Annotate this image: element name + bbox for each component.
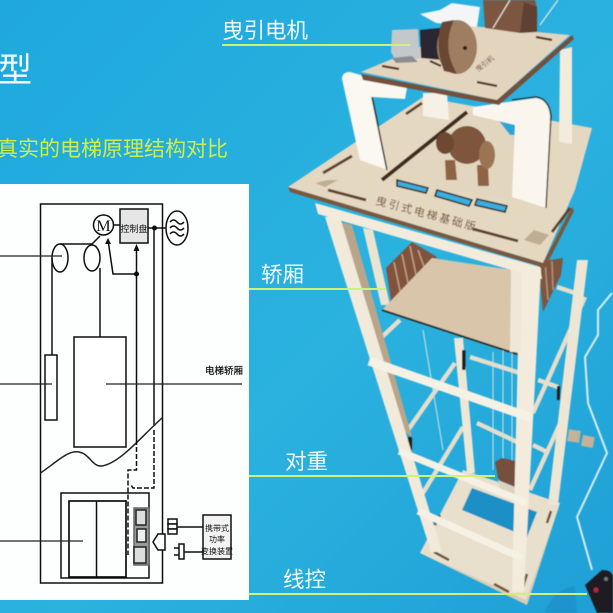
label: counterweight: 对重	[285, 450, 328, 474]
traction motor	[391, 20, 477, 74]
label: elevator car: 电梯轿厢	[205, 365, 243, 377]
lower pulley assembly	[436, 126, 495, 186]
top plate: 曳引机	[474, 54, 496, 74]
left front post	[325, 217, 442, 552]
control panel	[120, 209, 148, 243]
rear braces	[382, 287, 585, 493]
spare wooden pieces	[567, 429, 595, 448]
elevator car	[382, 242, 563, 355]
floor highlight	[545, 586, 577, 613]
plate slots	[323, 103, 570, 241]
plate engraved text: 曳引式电梯基础版	[374, 193, 477, 234]
power source	[166, 211, 188, 245]
inner left post	[340, 222, 412, 437]
base board	[420, 470, 560, 605]
back post	[454, 338, 475, 473]
car back wall	[386, 242, 437, 307]
motor: M	[96, 218, 111, 235]
right arch support	[473, 98, 550, 208]
hanging ropes	[423, 330, 512, 480]
top support beam	[315, 203, 542, 279]
portable power converter	[201, 515, 233, 559]
label: wire control: 线控	[283, 568, 326, 592]
portable connector arrow	[153, 519, 203, 559]
portable power converter: 携带式	[205, 523, 229, 533]
control panel: 控制盘	[120, 223, 148, 234]
far right wall	[559, 47, 572, 144]
upper pulleys	[483, 0, 558, 33]
counterweight	[45, 355, 57, 420]
label: traction motor: 曳引电机	[222, 19, 309, 43]
white fluff	[420, 3, 480, 27]
middle plate	[288, 47, 592, 268]
panel: schematic diagram	[0, 184, 249, 600]
right front post	[512, 268, 541, 592]
label: car: 轿厢	[261, 263, 304, 287]
signal wiring	[105, 226, 156, 440]
left arch support	[342, 72, 407, 170]
label: car	[249, 263, 386, 289]
background wire	[577, 293, 612, 570]
center upright panel	[423, 93, 449, 120]
elevator model photo	[288, 0, 613, 613]
black clips	[408, 350, 560, 450]
top plate	[361, 26, 574, 105]
plate window cut-outs	[397, 180, 507, 212]
car floor	[382, 258, 520, 355]
control panel switches	[134, 508, 149, 565]
portable power converter: 功率	[209, 534, 225, 544]
counterweight	[495, 458, 517, 498]
hoistway frame	[40, 204, 162, 583]
break line	[40, 418, 162, 473]
opening in plate	[382, 112, 548, 205]
dashed wiring	[128, 430, 154, 555]
elevator doors	[61, 493, 149, 578]
motor	[94, 215, 114, 235]
elevator car	[74, 337, 126, 447]
leader lines	[0, 256, 242, 541]
pulleys and ropes	[52, 225, 166, 355]
remote control	[585, 570, 613, 613]
right rear post	[548, 260, 588, 505]
subtitle: 真实的电梯原理结构对比	[0, 138, 228, 161]
front horizontal bands	[369, 361, 532, 558]
corner pads	[315, 180, 549, 245]
portable power converter: 变换装置	[201, 546, 233, 556]
car right wall	[538, 258, 563, 312]
